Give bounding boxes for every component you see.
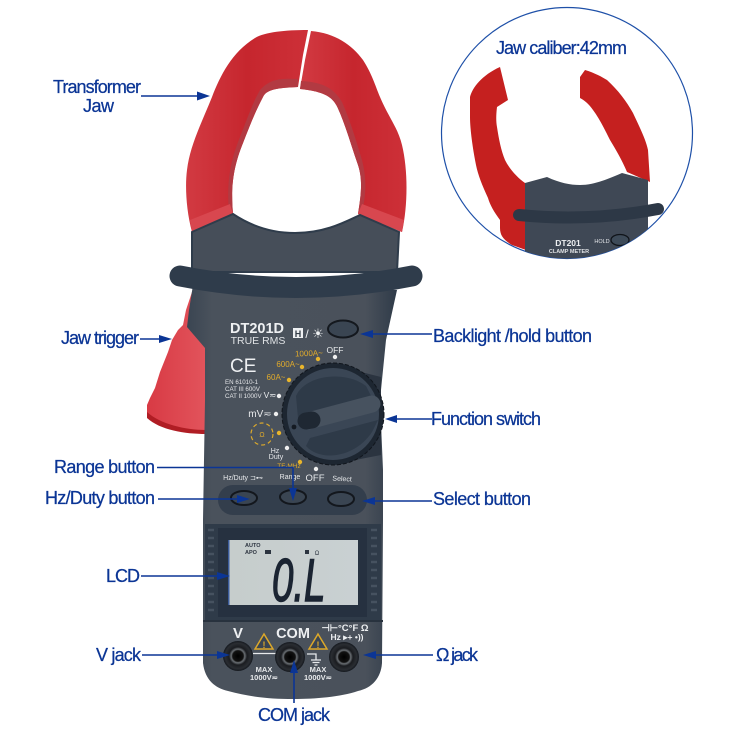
LCD screen: AUTO: [245, 543, 261, 549]
ohm jack: [329, 642, 359, 672]
CE mark and standards: EN 61010-1: [225, 379, 259, 386]
jaw trigger: [147, 292, 206, 434]
warning triangles: !: [316, 640, 320, 650]
hold and backlight icons: ☀: [312, 326, 324, 341]
CE mark and standards: CE: [230, 356, 256, 377]
COM jack: [275, 642, 305, 672]
transformer jaw: [186, 30, 406, 232]
label: select button: [362, 489, 531, 509]
function scale labels: Hz: [271, 448, 280, 455]
hold and backlight icons: /: [305, 327, 309, 341]
jack labels: V: [233, 625, 243, 642]
inset: jaw caliber: [442, 8, 692, 260]
LCD screen: Ω: [315, 551, 320, 557]
upper body: [192, 214, 399, 272]
warning triangles: [255, 634, 327, 650]
V jack: [223, 641, 253, 671]
max voltage ratings: 1000V≂: [250, 673, 279, 682]
label: transformer jaw: Jaw: [83, 96, 115, 116]
label: ohm jack: Ω jack: [436, 645, 479, 665]
label: COM jack: [258, 660, 331, 725]
function scale dots: [274, 355, 337, 471]
LCD screen: APO: [245, 550, 258, 556]
warning triangles: !: [262, 640, 266, 650]
label: COM jack: COM jack: [258, 705, 331, 725]
label: V jack: [96, 645, 230, 665]
label: backlight hold button: [360, 326, 592, 346]
label: function switch: Function switch: [431, 409, 541, 429]
continuity and capacitance symbol: [251, 423, 273, 445]
function switch dial: [282, 363, 384, 465]
max voltage ratings: [250, 665, 333, 682]
inset circle: [442, 8, 692, 258]
label: LCD: [106, 566, 230, 586]
label: range button: Range button: [54, 457, 155, 477]
function scale labels: [248, 345, 344, 484]
range button: [280, 490, 306, 504]
inset band: [519, 209, 658, 217]
function scale labels: V≂: [264, 390, 276, 400]
jack labels: COM: [276, 626, 310, 642]
clamp meter: [147, 30, 412, 699]
jack labels: Hz ▸+ •)): [331, 632, 364, 642]
main body: [187, 285, 397, 699]
label: ohm jack: [363, 645, 479, 665]
function scale labels: Duty: [269, 454, 284, 461]
jaw caliber text: Jaw caliber:42mm: [496, 38, 627, 58]
model name: [230, 321, 285, 347]
right jaw: [580, 70, 650, 182]
label: range button: [54, 457, 297, 501]
hold and backlight icons: [293, 326, 324, 341]
inset labels: DT201: [555, 238, 581, 248]
label: select button: Select button: [433, 489, 531, 509]
button labels: [223, 474, 352, 484]
function scale labels: 1000A~: [295, 349, 323, 358]
max voltage ratings: MAX: [310, 665, 326, 674]
button labels: Range: [280, 474, 300, 481]
button labels: Select: [332, 475, 352, 484]
trigger guard band: [180, 276, 412, 288]
LCD screen: 0.L: [272, 546, 325, 614]
LCD screen: [228, 540, 358, 614]
hold and backlight icons: H: [295, 329, 301, 339]
open jaw detail: HOLD: [594, 239, 610, 245]
label: Hz/Duty button: [45, 488, 250, 508]
CE mark and standards: CAT II 1000V: [225, 393, 262, 400]
jack labels: ⊣⊢°C°F Ω: [321, 623, 369, 634]
max voltage ratings: MAX: [256, 665, 272, 674]
label: transformer jaw: [53, 77, 210, 116]
continuity and capacitance symbol: Ω: [259, 432, 265, 439]
jack labels: [233, 623, 369, 642]
select button: [328, 492, 354, 506]
function scale labels: 600A~: [276, 360, 300, 369]
max voltage ratings: 1000V≂: [304, 673, 333, 682]
open jaw detail: [470, 67, 658, 260]
Hz/Duty button: [231, 491, 257, 505]
LCD surround: [205, 524, 381, 622]
jack panel divider: [203, 620, 383, 622]
button labels: Hz/Duty ⊐⊷: [223, 475, 263, 482]
label: transformer jaw: Transformer: [53, 77, 141, 97]
function scale labels: TF·MHz: [277, 463, 301, 470]
model name: TRUE RMS: [231, 335, 285, 347]
label: V jack: V jack: [96, 645, 142, 665]
function scale labels: OFF: [306, 473, 325, 484]
function scale labels: OFF: [326, 345, 344, 355]
open jaw detail: CLAMP METER: [549, 249, 589, 255]
model name: DT201D: [230, 321, 284, 337]
label: LCD: LCD: [106, 566, 140, 586]
backlight hold button: [328, 320, 358, 338]
CE mark and standards: [225, 356, 262, 400]
function scale labels: mV≂: [248, 409, 272, 420]
function scale labels: 60A~: [267, 373, 286, 382]
label: Hz/Duty button: Hz/Duty button: [45, 488, 155, 508]
connecting lines and ground symbol: [253, 654, 321, 665]
CE mark and standards: CAT III 600V: [225, 386, 261, 393]
label: backlight hold button: Backlight /hold button: [433, 326, 592, 346]
label: jaw trigger: Jaw trigger: [61, 328, 139, 348]
left jaw: [470, 67, 526, 250]
button panel: [218, 485, 367, 515]
inset body: [525, 173, 648, 260]
